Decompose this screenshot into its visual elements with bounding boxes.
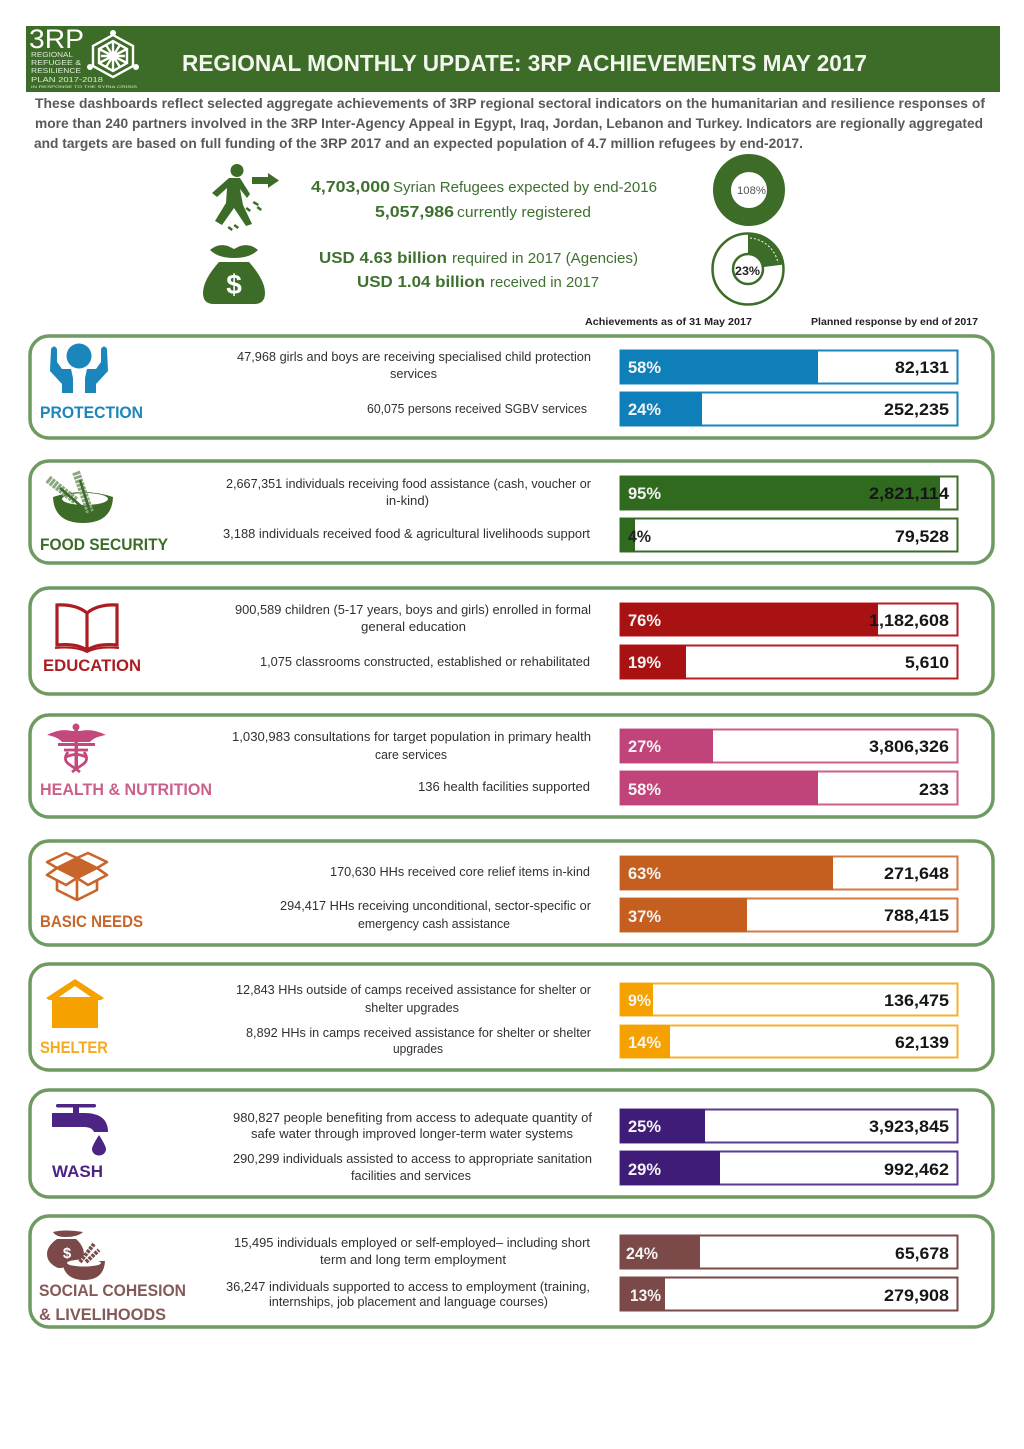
indicators text: 290,299 individuals assisted to access to appropriate sanitation <box>233 1152 592 1166</box>
label: PROTECTION <box>40 403 143 422</box>
indicators text <box>235 603 591 669</box>
icon: house <box>46 979 104 1028</box>
icon: money bag: $ <box>226 269 242 300</box>
bar: 4%: 4% <box>628 528 651 546</box>
icon: wheat bowl <box>48 472 113 523</box>
bar: 27%: 27% <box>628 738 661 756</box>
funding figures: USD 4.63 billion <box>319 250 447 267</box>
funding figures: USD 1.04 billion <box>357 274 485 291</box>
logo: 3RP: REGIONAL <box>31 52 73 59</box>
icon: open box <box>47 853 107 900</box>
indicators text: 60,075 persons received SGBV services <box>367 402 587 416</box>
label: HEALTH & NUTRITION <box>40 780 212 799</box>
panel: health and nutrition <box>30 715 993 817</box>
funding figures: received in 2017 <box>490 275 599 291</box>
indicators text <box>232 730 591 794</box>
indicators text: 47,968 girls and boys are receiving specialised child protection <box>237 350 591 364</box>
icon: money bag <box>203 245 265 304</box>
bar: 24%: 24% <box>628 401 661 419</box>
label: BASIC NEEDS <box>40 912 143 931</box>
bar: 9% <box>620 983 958 1016</box>
bar: 19%: 19% <box>628 654 661 672</box>
panel: education <box>30 588 993 694</box>
bar: 24%: 252,235 <box>884 400 949 419</box>
indicators text: 980,827 people benefiting from access to adequate quantity of <box>233 1111 593 1125</box>
indicators text: 1,030,983 consultations for target population in primary health <box>232 730 591 744</box>
indicators text: 1,075 classrooms constructed, established or rehabilitated <box>260 655 590 669</box>
bar: 25%: 25% <box>628 1118 661 1136</box>
panel: wash <box>30 1090 993 1197</box>
intro paragraph <box>34 95 985 151</box>
indicators text: facilities and services <box>351 1169 471 1183</box>
icon: walking refugee with arrow <box>212 164 279 231</box>
bar: 24%: 24% <box>626 1245 658 1263</box>
refugee figures <box>311 179 657 221</box>
intro paragraph: These dashboards reflect selected aggregate achievements of 3RP regional sectoral indicators on the humanitarian and resilience responses of <box>35 95 985 111</box>
donut: 23% <box>712 233 784 304</box>
indicators text: upgrades <box>393 1042 443 1056</box>
indicators text: 8,892 HHs in camps received assistance for shelter or shelter <box>246 1026 591 1040</box>
panel: shelter <box>30 964 993 1070</box>
refugee figures: 5,057,986 <box>375 204 454 221</box>
label: & LIVELIHOODS <box>39 1305 166 1324</box>
icon: caduceus <box>47 724 106 772</box>
bar: 29%: 29% <box>628 1161 661 1179</box>
bar: 63%: 271,648 <box>884 864 949 883</box>
bar: 4%: 79,528 <box>895 527 949 546</box>
refugee figures: 4,703,000 <box>311 179 390 196</box>
bar: 19%: 5,610 <box>905 653 949 672</box>
indicators text <box>233 1111 593 1183</box>
bar: 58% <box>620 771 958 805</box>
panel: food security <box>30 461 993 563</box>
indicators text: 900,589 children (5-17 years, boys and girls) enrolled in formal <box>235 603 591 617</box>
bar: 58%: 82,131 <box>895 358 949 377</box>
logo: 3RP: RESILIENCE <box>31 68 81 75</box>
icon: open book <box>55 605 119 652</box>
bar: 29%: 992,462 <box>884 1160 949 1179</box>
indicators text: internships, job placement and language courses) <box>269 1295 548 1309</box>
icon: water tap <box>52 1104 108 1156</box>
bar: 58%: 58% <box>628 781 661 799</box>
bar: 13%: 279,908 <box>884 1286 949 1305</box>
bar: 29% <box>620 1151 958 1185</box>
label: FOOD SECURITY <box>40 535 169 554</box>
logo: 3RP: REFUGEE & <box>31 60 81 67</box>
intro paragraph: and targets are based on full funding of the 3RP 2017 and an expected population of 4.7 million refugees by end-2017. <box>34 135 803 151</box>
indicators text: care services <box>375 748 447 762</box>
label: SHELTER <box>40 1038 108 1057</box>
donut: 23%: 23% <box>735 266 760 278</box>
icon: money bag with bowl and wheat: $ <box>63 1245 72 1262</box>
refugee figures: currently registered <box>457 205 591 221</box>
logo: 3RP: IN RESPONSE TO THE SYRIA CRISIS <box>31 84 137 89</box>
indicators text: 294,417 HHs receiving unconditional, sector-specific or <box>280 899 591 913</box>
refugee figures: Syrian Refugees expected by end-2016 <box>393 180 657 196</box>
bar: 95%: 2,821,114 <box>869 484 950 503</box>
bar: 13%: 13% <box>630 1287 661 1305</box>
label <box>39 1281 186 1324</box>
indicators text: shelter upgrades <box>365 1001 459 1015</box>
bar: 9%: 9% <box>628 992 651 1010</box>
indicators text: in-kind) <box>386 494 429 508</box>
bar: 58% <box>620 350 958 384</box>
bar: 14% <box>620 1025 958 1058</box>
indicators text: safe water through improved longer-term water systems <box>251 1127 573 1141</box>
indicators text <box>236 983 591 1056</box>
funding figures <box>319 250 638 291</box>
bar: 63%: 63% <box>628 865 661 883</box>
label: EDUCATION <box>43 656 141 675</box>
label: WASH <box>52 1162 103 1181</box>
bar: 76% <box>620 603 958 636</box>
icon: money bag with bowl and wheat <box>47 1230 105 1280</box>
bar: 25%: 3,923,845 <box>869 1117 949 1136</box>
bar: 24%: 65,678 <box>895 1244 949 1263</box>
donut: 108%: 108% <box>737 185 766 197</box>
indicators text: services <box>390 367 437 381</box>
indicators text <box>226 1236 591 1309</box>
column headings: Planned response by end of 2017 <box>811 316 978 328</box>
bar: 24% <box>620 1235 958 1269</box>
bar: 76%: 76% <box>628 612 661 630</box>
bar: 27%: 3,806,326 <box>869 737 949 756</box>
indicators text: 12,843 HHs outside of camps received assistance for shelter or <box>236 983 591 997</box>
indicators text: emergency cash assistance <box>358 917 510 931</box>
bar: 27% <box>620 729 958 763</box>
indicators text: 15,495 individuals employed or self-employed– including short <box>234 1236 591 1250</box>
logo: 3RP: 3RP <box>29 24 84 54</box>
bar: 9%: 136,475 <box>884 991 949 1010</box>
title: REGIONAL MONTHLY UPDATE: 3RP ACHIEVEMENTS MAY 2017 <box>182 50 867 76</box>
indicators text: 136 health facilities supported <box>418 780 590 794</box>
bar: 58%: 233 <box>919 780 949 799</box>
indicators text: 170,630 HHs received core relief items in-kind <box>330 865 590 879</box>
indicators text <box>223 477 591 541</box>
column headings: Achievements as of 31 May 2017 <box>585 316 752 328</box>
indicators text: 36,247 individuals supported to access to employment (training, <box>226 1280 590 1294</box>
bar: 95%: 95% <box>628 485 661 503</box>
panel: basic needs <box>30 841 993 945</box>
bar: 19% <box>620 645 958 679</box>
bar: 37%: 788,415 <box>884 906 949 925</box>
logo: 3RP: PLAN 2017-2018 <box>31 77 103 84</box>
bar: 24% <box>620 392 958 426</box>
bar: 37%: 37% <box>628 908 661 926</box>
bar: 58%: 58% <box>628 359 661 377</box>
indicators text <box>237 350 591 416</box>
header banner <box>26 24 1000 92</box>
bar: 25% <box>620 1109 958 1143</box>
logo: 3RP <box>29 24 139 89</box>
panel: protection <box>30 336 993 438</box>
indicators text: 3,188 individuals received food & agricultural livelihoods support <box>223 527 591 541</box>
column headings <box>585 316 978 328</box>
bar: 95% <box>620 476 958 510</box>
label: SOCIAL COHESION <box>39 1281 186 1300</box>
funding figures: required in 2017 (Agencies) <box>452 251 638 267</box>
intro paragraph: more than 240 partners involved in the 3RP Inter-Agency Appeal in Egypt, Iraq, Jordan, Lebanon and Turkey. Indicators are regionally aggregated <box>35 115 983 131</box>
indicators text: term and long term employment <box>320 1253 507 1267</box>
bar: 13% <box>620 1277 958 1311</box>
bar: 63% <box>620 856 958 890</box>
donut: 108% <box>722 163 776 217</box>
bar: 37% <box>620 898 958 932</box>
bar: 4% <box>620 518 958 552</box>
panel: social cohesion and livelihoods <box>30 1216 993 1327</box>
icon: protecting hands <box>50 344 108 393</box>
bar: 14%: 14% <box>628 1034 661 1052</box>
bar: 76%: 1,182,608 <box>869 611 949 630</box>
indicators text: general education <box>361 620 466 634</box>
indicators text <box>280 865 591 931</box>
indicators text: 2,667,351 individuals receiving food assistance (cash, voucher or <box>226 477 591 491</box>
bar: 14%: 62,139 <box>895 1033 949 1052</box>
